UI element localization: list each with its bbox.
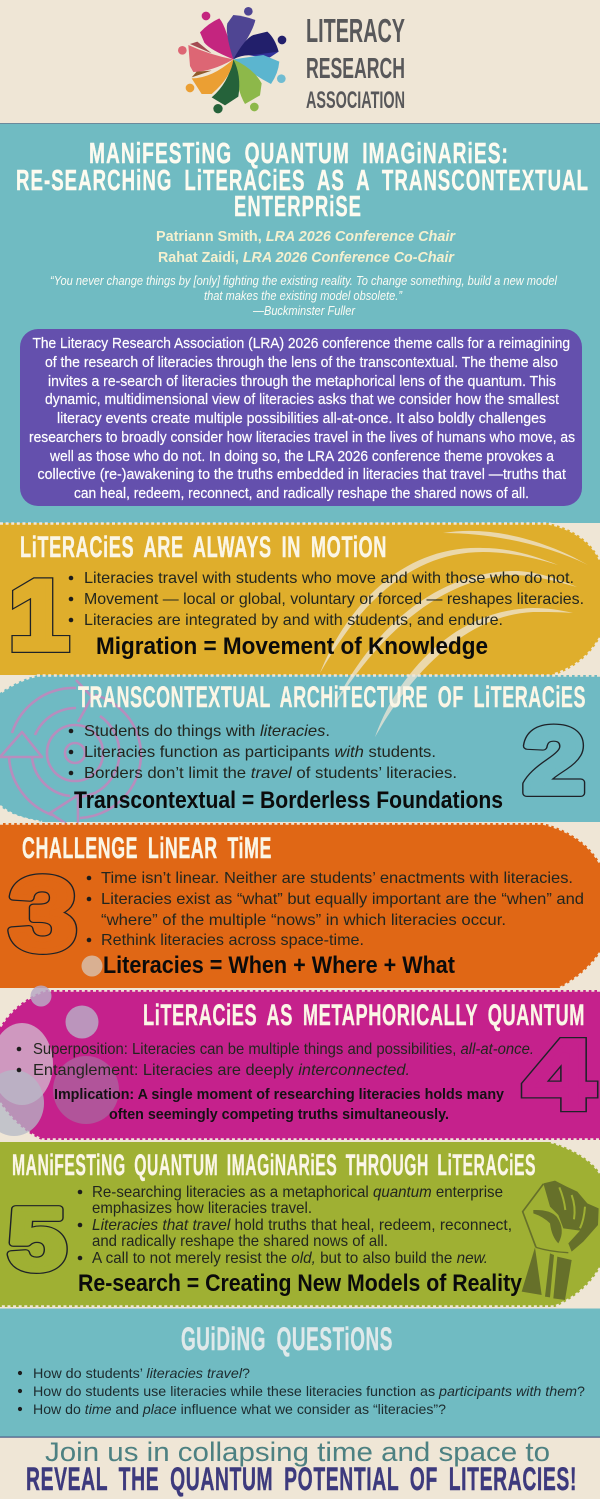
bullets: [78, 1184, 512, 1267]
panel: call to action: [0, 1436, 600, 1497]
logo wordmark: ASSOCIATION: [306, 87, 405, 114]
intro box: can heal, redeem, reconnect, and radically reshape the shared nows of all.: [74, 486, 529, 502]
questions: How do students’ literacies travel?: [33, 1365, 250, 1381]
bullets: Literacies are integrated by and with students, and endure.: [84, 612, 503, 629]
implication: Implication: A single moment of researching literacies holds many: [54, 1086, 505, 1103]
numeral 4: 4: [524, 1020, 594, 1129]
icon: circular arrows: [0, 680, 141, 832]
equation: Migration = Movement of Knowledge: [96, 633, 488, 660]
bullets: emphasizes how literacies travel.: [92, 1200, 312, 1217]
title: ENTERPRiSE: [234, 191, 362, 223]
bubbles: [0, 986, 119, 1136]
numeral 1: 1: [9, 560, 69, 670]
intro box: collective (re-)awakening to the truths embedded in literacies that travel —truths that: [38, 467, 566, 483]
quote: —Buckminster Fuller: [252, 304, 356, 318]
logo wordmark: RESEARCH: [306, 53, 405, 85]
bullets: Literacies that travel hold truths that heal, redeem, reconnect,: [92, 1217, 512, 1234]
implication: [54, 1086, 505, 1123]
panel: 1 literacies are always in motion: [9, 531, 584, 670]
panel: 2 transcontextual architecture: [0, 680, 586, 832]
bullets: [17, 1041, 534, 1079]
questions: How do time and place influence what we consider as “literacies”?: [33, 1401, 446, 1417]
bullets: Students do things with literacies.: [84, 723, 330, 740]
equation: Transcontextual = Borderless Foundations: [74, 787, 503, 814]
panel: 4 literacies as metaphorically quantum: [0, 986, 600, 1140]
bullets: Superposition: Literacies can be multiple things and possibilities, all-at-once.: [33, 1041, 534, 1058]
bullets: [69, 570, 584, 629]
icon: LRA pinwheel: [178, 7, 286, 113]
bullets: Literacies exist as “what” but equally important are the “when” and: [101, 891, 584, 908]
implication: often seemingly competing truths simultaneously.: [109, 1106, 449, 1123]
intro box: researchers to broadly consider how literacies travel in the lives of humans who move, as: [29, 430, 575, 446]
logo wordmark: LITERACY: [306, 12, 405, 49]
panel background: 2 teal band: [0, 675, 600, 822]
bullets: and radically reshape the shared nows of all.: [92, 1233, 388, 1250]
numeral 5: 5: [8, 1191, 66, 1288]
bullets: Literacies travel with students who move and with those who do not.: [84, 570, 574, 587]
numeral 4: 4: [524, 1020, 594, 1129]
equation: Literacies = When + Where + What: [103, 952, 455, 979]
bullets: Rethink literacies across space-time.: [101, 932, 364, 949]
header: Literacy Research Association logo: [178, 7, 405, 114]
intro box: of the research of literacies through the lens of the transcontextual. The theme also: [45, 355, 558, 371]
heading: GUiDiNG QUESTiONS: [181, 1321, 393, 1357]
equation: Re-search = Creating New Models of Reality: [78, 1270, 523, 1297]
intro box: invites a re-search of literacies through the metaphorical lens of the quantum. This: [48, 374, 556, 390]
decorative bubble: [82, 956, 102, 976]
intro box: literacy events create multiple possibilities all-at-once. It also boldly challenges: [57, 411, 546, 427]
bullets: [87, 870, 584, 949]
panel: 3 challenge linear time: [0, 823, 600, 988]
quote: that makes the existing model obsolete.”: [204, 289, 403, 303]
conference chairs: Rahat Zaidi, LRA 2026 Conference Co-Chair: [158, 250, 455, 266]
numeral 3: 3: [9, 857, 77, 973]
numeral 2: 2: [523, 708, 585, 813]
conference chairs: [156, 229, 456, 266]
bullets: Re-searching literacies as a metaphorical quantum enterprise: [92, 1184, 503, 1201]
intro box: [20, 329, 582, 506]
bullets: Borders don’t limit the travel of students’ literacies.: [84, 765, 457, 782]
numeral 5: 5: [8, 1191, 66, 1288]
questions: How do students use literacies while these literacies function as participants with them?: [33, 1383, 585, 1399]
questions: [18, 1365, 585, 1417]
bullets: Time isn’t linear. Neither are students’ enactments with literacies.: [101, 870, 573, 887]
logo wordmark: [306, 12, 405, 114]
numeral 2: 2: [523, 708, 585, 813]
bullets: “where” of the multiple “nows” in which literacies occur.: [101, 912, 506, 929]
bullets: A call to not merely resist the old, but to also build the new.: [92, 1250, 488, 1267]
title: [16, 138, 589, 223]
invitation line: Join us in collapsing time and space to: [45, 1437, 550, 1467]
bullets: Movement — local or global, voluntary or forced — reshapes literacies.: [84, 591, 584, 608]
numeral 3: 3: [9, 857, 77, 973]
panel: 5 manifesting quantum imaginaries through literacies: [0, 1142, 600, 1307]
heading: CHALLENGE LiNEAR TiME: [22, 832, 272, 865]
bullets: Literacies function as participants with students.: [84, 744, 436, 761]
icon: raised fist: [522, 1181, 599, 1300]
intro box: dynamic, multidimensional view of literacies asks that we consider how the smallest: [45, 392, 559, 408]
quote: [50, 274, 558, 318]
intro box: The Literacy Research Association (LRA) 2026 conference theme calls for a reimagining: [32, 336, 570, 352]
intro box: well as those who do not. In doing so, the LRA 2026 conference theme provokes a: [49, 449, 555, 465]
panel: title and introduction: [0, 123, 600, 523]
conference chairs: Patriann Smith, LRA 2026 Conference Chair: [156, 229, 456, 245]
decorative swooshes: [320, 531, 588, 737]
bullets: Entanglement: Literacies are deeply interconnected.: [33, 1062, 410, 1079]
numeral 1: 1: [9, 560, 69, 670]
panel: guiding questions: [0, 1308, 600, 1437]
bullets: [69, 723, 457, 782]
panel background: 1 gold band: [0, 523, 600, 675]
